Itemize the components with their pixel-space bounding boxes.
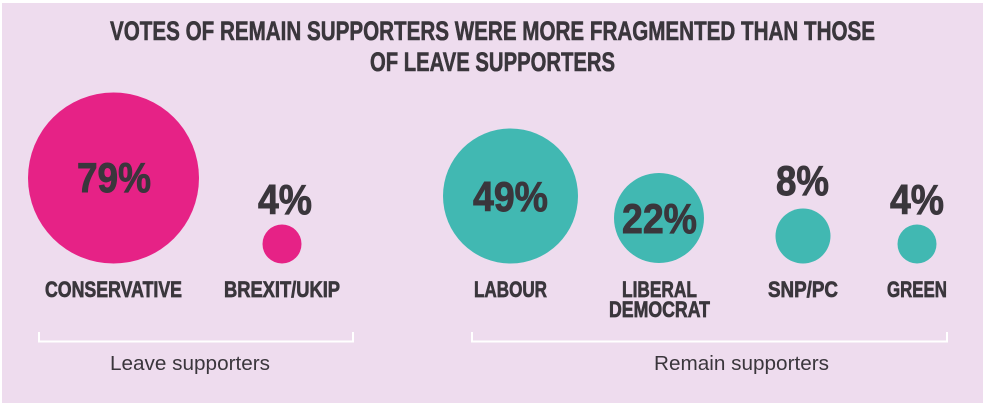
bubble: Labour 49%: [443, 128, 578, 302]
bubble: Liberal Democrat 22%: 22%: [622, 195, 697, 242]
bubble: Green 4%: GREEN: [887, 277, 947, 302]
title: [110, 16, 875, 77]
bubble: Liberal Democrat 22%: LIBERAL: [622, 277, 697, 302]
bubble: Labour 49%: 49%: [473, 173, 548, 220]
bubble: SNP/PC 8%: SNP/PC: [768, 277, 838, 302]
title: OF LEAVE SUPPORTERS: [370, 47, 615, 77]
bubble: Brexit/UKIP 4%: 4%: [258, 176, 312, 223]
bubble: Green 4%: 4%: [890, 176, 944, 223]
bubble: Green 4%: [887, 176, 947, 302]
bubble: Labour 49%: LABOUR: [474, 277, 547, 302]
group: Remain supporters: Remain supporters: [654, 353, 829, 375]
bubble: Liberal Democrat 22%: DEMOCRAT: [609, 297, 710, 322]
bubble: Conservative 79%: 79%: [77, 154, 151, 201]
bubble: SNP/PC 8%: [768, 157, 838, 302]
group: Remain supporters: [472, 332, 947, 375]
bubble: Liberal Democrat 22%: [609, 173, 710, 322]
bubble: Brexit/UKIP 4%: [224, 176, 340, 302]
group: Leave supporters: [39, 332, 353, 375]
bubble: SNP/PC 8%: 8%: [776, 157, 829, 204]
bubble: Brexit/UKIP 4%: BREXIT/UKIP: [224, 277, 340, 302]
group: Leave supporters: Leave supporters: [110, 353, 270, 375]
bubble: Conservative 79%: CONSERVATIVE: [45, 277, 182, 302]
bubble: Conservative 79%: [28, 92, 199, 302]
